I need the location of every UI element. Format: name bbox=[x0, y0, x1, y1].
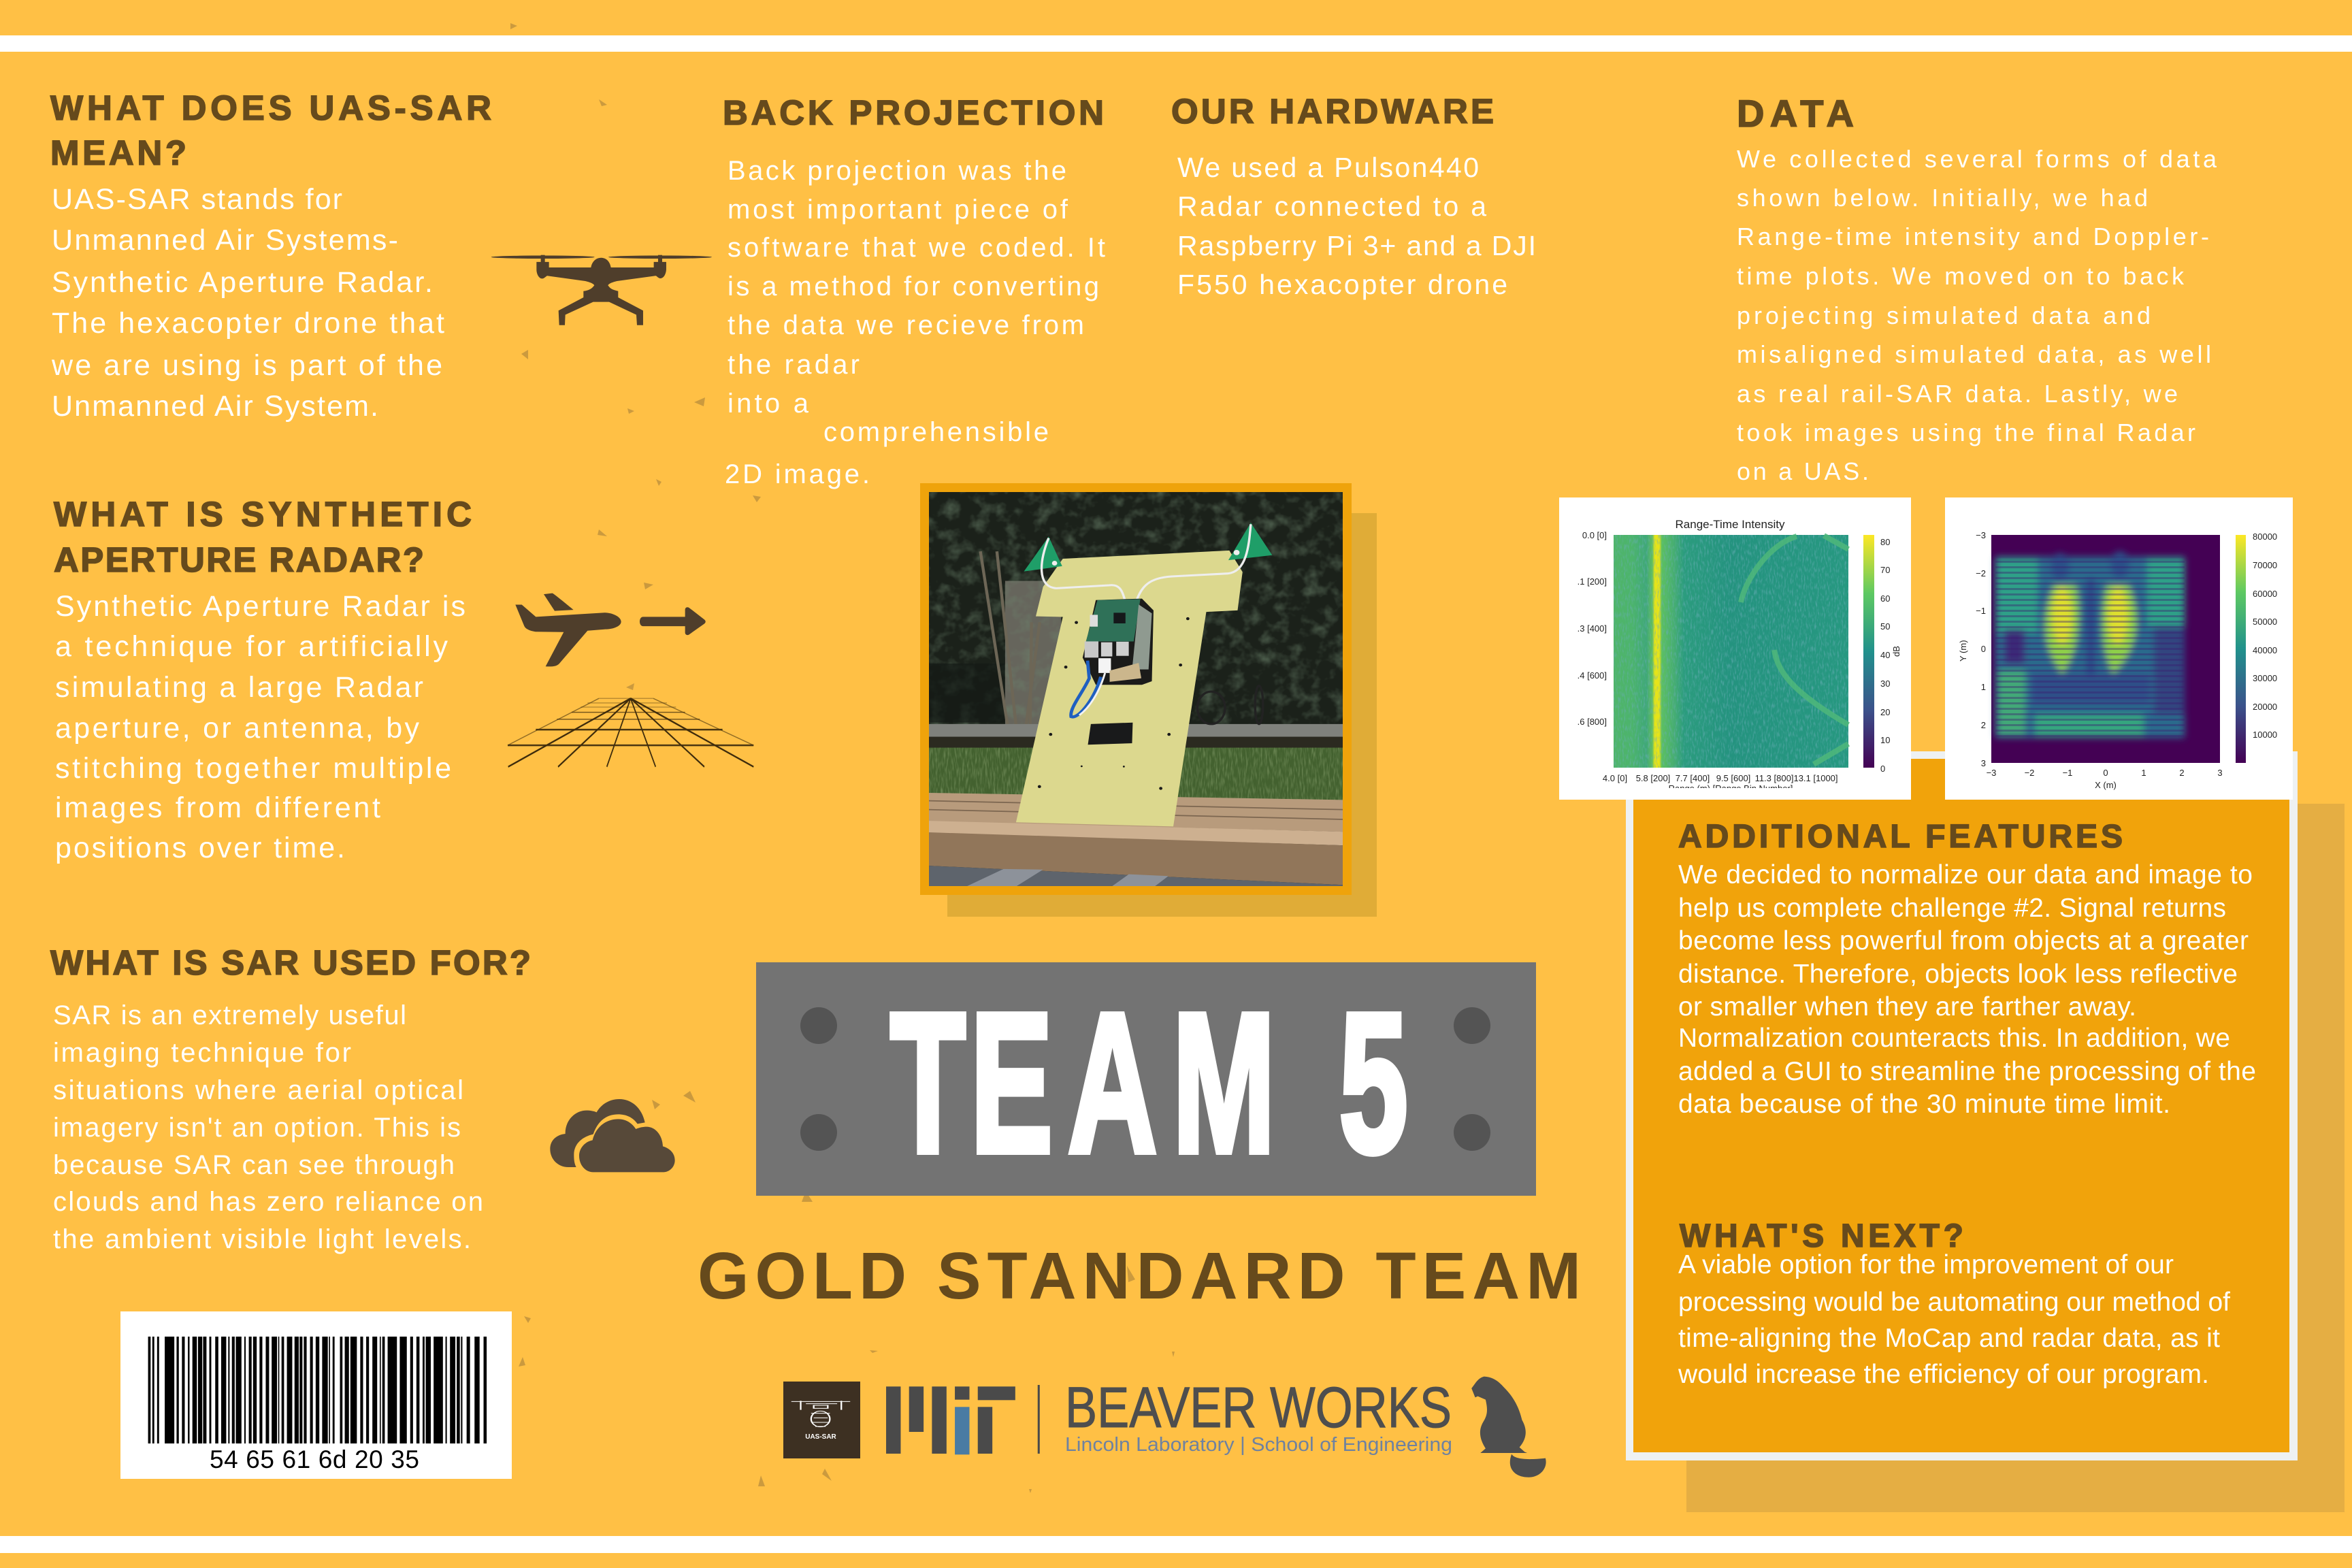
colour bar labels: 30000 bbox=[2253, 673, 2277, 683]
body text: processing would be automating our method of bbox=[1678, 1288, 2230, 1317]
body text: Synthetic Aperture Radar is bbox=[55, 590, 466, 623]
body text: a technique for artificially bbox=[55, 630, 448, 663]
logo caption: UAS-SAR bbox=[805, 1433, 837, 1441]
y axis labels: −3 bbox=[1976, 530, 1986, 540]
colour bar labels: 10 bbox=[1880, 735, 1890, 745]
x axis title: X (m) bbox=[2095, 780, 2117, 790]
heading: WHAT IS SYNTHETIC bbox=[54, 495, 472, 534]
y axis labels: 0 bbox=[1981, 644, 1986, 654]
x axis labels: 1 bbox=[2141, 768, 2146, 778]
colour bar labels: 40 bbox=[1880, 650, 1890, 660]
body text: or smaller when they are farther away. bbox=[1678, 992, 2136, 1022]
barcode number: 54 65 61 6d 20 35 bbox=[210, 1446, 419, 1473]
icon: clouds bbox=[550, 1099, 675, 1172]
wordmark subtitle: Lincoln Laboratory | School of Engineering bbox=[1065, 1434, 1452, 1456]
body text: We collected several forms of data bbox=[1737, 145, 2217, 173]
body text: comprehensible bbox=[823, 417, 1049, 447]
body text: Unmanned Air System. bbox=[52, 390, 378, 423]
body text: the radar bbox=[728, 350, 860, 380]
body text: the ambient visible light levels. bbox=[53, 1224, 471, 1254]
panel shadow bbox=[1686, 804, 2345, 1512]
body text: took images using the final Radar bbox=[1737, 419, 2195, 446]
body text: we are using is part of the bbox=[51, 349, 442, 382]
body text: SAR is an extremely useful bbox=[53, 1000, 406, 1030]
body text: most important piece of bbox=[728, 195, 1068, 225]
range-time intensity plot bbox=[1559, 497, 1911, 800]
y axis labels: 1 bbox=[1981, 682, 1986, 692]
colour bar labels: 80 bbox=[1880, 537, 1890, 547]
x axis labels: 2 bbox=[2179, 768, 2185, 778]
body text: shown below. Initially, we had bbox=[1737, 184, 2148, 212]
x axis title: Range (m) [Range Bin Number] bbox=[1669, 783, 1793, 794]
body text: Raspberry Pi 3+ and a DJI bbox=[1177, 230, 1536, 261]
x axis labels: 3 bbox=[2217, 768, 2223, 778]
x axis labels: 9.5 [600] bbox=[1716, 773, 1750, 783]
colour bar bbox=[1863, 535, 1874, 768]
colour bar labels: 50000 bbox=[2253, 617, 2277, 627]
heatmap bbox=[1614, 535, 1848, 768]
body text: Normalization counteracts this. In addition, we bbox=[1678, 1024, 2230, 1053]
body text: We decided to normalize our data and image to bbox=[1678, 860, 2253, 889]
x axis labels: 13.1 [1000] bbox=[1793, 773, 1838, 783]
y axis labels: 3 bbox=[1981, 758, 1986, 768]
colour bar labels: 20000 bbox=[2253, 702, 2277, 712]
x axis labels: −1 bbox=[2063, 768, 2072, 778]
logo: MIT bbox=[886, 1385, 1040, 1454]
logo: beaver works wordmark bbox=[1065, 1375, 1452, 1456]
y axis labels: 2 bbox=[1981, 720, 1986, 730]
x axis labels: 7.7 [400] bbox=[1676, 773, 1710, 783]
body text: because SAR can see through bbox=[53, 1150, 455, 1180]
body text: time plots. We moved on to back bbox=[1737, 262, 2185, 290]
body text: misaligned simulated data, as well bbox=[1737, 340, 2211, 368]
body text: Back projection was the bbox=[728, 156, 1066, 186]
logo: UAS-SAR bbox=[783, 1382, 860, 1458]
heading: APERTURE RADAR? bbox=[54, 540, 424, 579]
body text: data because of the 30 minute time limit. bbox=[1678, 1090, 2170, 1119]
colour bar labels: 10000 bbox=[2253, 730, 2277, 740]
barcode bars bbox=[148, 1337, 487, 1443]
colour bar labels: 40000 bbox=[2253, 645, 2277, 655]
y axis labels: .1 [200] bbox=[1578, 576, 1607, 587]
photo shadow bbox=[947, 513, 1377, 917]
x axis labels: −3 bbox=[1987, 768, 1996, 778]
heading: MEAN? bbox=[50, 133, 186, 172]
panel: what is synthetic aperture radar bbox=[54, 495, 472, 864]
y axis labels: 0.0 [0] bbox=[1582, 530, 1607, 540]
body text: software that we coded. It bbox=[728, 233, 1105, 263]
icon: arrow bbox=[640, 607, 706, 635]
colour bar labels: 30 bbox=[1880, 679, 1890, 689]
photo: radar mounted on T-shaped board bbox=[929, 492, 1343, 886]
team 5 sign bbox=[756, 962, 1536, 1196]
barcode bbox=[120, 1311, 512, 1479]
colour bar unit: dB bbox=[1891, 646, 1901, 657]
logo: beaver works wordmark: BEAVER WORKS bbox=[1065, 1375, 1452, 1439]
body text: Unmanned Air Systems- bbox=[52, 224, 398, 257]
body text: situations where aerial optical bbox=[53, 1075, 463, 1105]
y axis labels: .3 [400] bbox=[1578, 623, 1607, 634]
body text: positions over time. bbox=[55, 832, 345, 864]
body text: distance. Therefore, objects look less reflective bbox=[1678, 960, 2238, 989]
panel: data bbox=[1737, 92, 2217, 485]
heading: WHAT'S NEXT? bbox=[1680, 1218, 1963, 1254]
sign rivets bbox=[800, 1007, 1490, 1151]
photo frame bbox=[920, 483, 1352, 895]
body text: We used a Pulson440 bbox=[1177, 152, 1479, 183]
body text: Range-time intensity and Doppler- bbox=[1737, 223, 2209, 250]
panel: what does UAS-SAR mean bbox=[50, 88, 491, 423]
heading: WHAT DOES UAS-SAR bbox=[50, 88, 491, 127]
logo drone mark bbox=[791, 1401, 850, 1427]
icon: ground grid bbox=[508, 698, 753, 767]
y axis title: Y (m) bbox=[1958, 640, 1968, 662]
y axis labels: −1 bbox=[1976, 606, 1986, 616]
panel: back projection bbox=[723, 93, 1105, 489]
body text: Radar connected to a bbox=[1177, 191, 1486, 222]
x axis labels: −2 bbox=[2025, 768, 2034, 778]
background speckles bbox=[510, 23, 1175, 1493]
back-projection image plot bbox=[1945, 497, 2293, 800]
plot title: Range-Time Intensity bbox=[1676, 518, 1785, 531]
panel: additional features and next steps bbox=[1626, 751, 2298, 1460]
bottom white band bbox=[0, 1536, 2352, 1553]
body text: help us complete challenge #2. Signal returns bbox=[1678, 894, 2226, 923]
colour bar bbox=[2236, 535, 2246, 763]
body text: aperture, or antenna, by bbox=[55, 712, 419, 745]
body text: simulating a large Radar bbox=[55, 671, 423, 704]
body text: would increase the efficiency of our program. bbox=[1678, 1360, 2209, 1389]
top white band bbox=[0, 35, 2352, 52]
icon: beaver bbox=[1471, 1377, 1546, 1477]
colour bar labels: 60 bbox=[1880, 593, 1890, 604]
x axis labels: 11.3 [800] bbox=[1755, 773, 1793, 783]
y axis labels: .6 [800] bbox=[1578, 717, 1607, 727]
team name: TEAM 5 bbox=[890, 973, 1408, 1194]
body text: imagery isn't an option. This is bbox=[53, 1113, 461, 1143]
panel: our hardware bbox=[1171, 92, 1536, 300]
body text: as real rail-SAR data. Lastly, we bbox=[1737, 380, 2178, 408]
body text: the data we recieve from bbox=[728, 310, 1084, 340]
subtitle: gold standard team: GOLD STANDARD TEAM bbox=[698, 1239, 1581, 1313]
body text: clouds and has zero reliance on bbox=[53, 1187, 483, 1217]
icon: drone bbox=[491, 255, 712, 325]
y axis labels: −2 bbox=[1976, 568, 1986, 578]
colour bar labels: 0 bbox=[1880, 764, 1885, 774]
body text: F550 hexacopter drone bbox=[1177, 269, 1507, 300]
heading: OUR HARDWARE bbox=[1171, 92, 1494, 131]
heading: WHAT IS SAR USED FOR? bbox=[50, 943, 531, 982]
heading: BACK PROJECTION bbox=[723, 93, 1104, 132]
colour bar labels: 60000 bbox=[2253, 589, 2277, 599]
body text: imaging technique for bbox=[53, 1038, 351, 1068]
colour bar labels: 50 bbox=[1880, 621, 1890, 632]
x axis labels: 5.8 [200] bbox=[1636, 773, 1670, 783]
colour bar labels: 70 bbox=[1880, 565, 1890, 575]
colour bar labels: 20 bbox=[1880, 707, 1890, 717]
x axis labels: 4.0 [0] bbox=[1603, 773, 1627, 783]
body text: projecting simulated data and bbox=[1737, 301, 2151, 329]
body text: The hexacopter drone that bbox=[52, 307, 444, 340]
body text: become less powerful from objects at a greater bbox=[1678, 926, 2249, 956]
body text: A viable option for the improvement of our bbox=[1678, 1250, 2174, 1279]
heading: ADDITIONAL FEATURES bbox=[1678, 819, 2123, 855]
y axis labels: .4 [600] bbox=[1578, 670, 1607, 681]
body text: on a UAS. bbox=[1737, 457, 1869, 485]
panel: what is SAR used for bbox=[50, 943, 531, 1254]
body text: time-aligning the MoCap and radar data, as it bbox=[1678, 1324, 2220, 1353]
body text: images from different bbox=[55, 791, 380, 824]
body text: Synthetic Aperture Radar. bbox=[52, 266, 433, 299]
image bbox=[1991, 535, 2220, 763]
colour bar labels: 80000 bbox=[2253, 532, 2277, 542]
body text: into a bbox=[728, 389, 809, 419]
body text: UAS-SAR stands for bbox=[52, 183, 342, 216]
heading: DATA bbox=[1737, 92, 1854, 135]
icon: airplane bbox=[515, 593, 621, 666]
body text: stitching together multiple bbox=[55, 752, 451, 785]
colour bar labels: 70000 bbox=[2253, 560, 2277, 570]
body text: 2D image. bbox=[725, 459, 870, 489]
body text: is a method for converting bbox=[728, 272, 1099, 301]
x axis labels: 0 bbox=[2103, 768, 2108, 778]
body text: added a GUI to streamline the processing of the bbox=[1678, 1057, 2256, 1086]
